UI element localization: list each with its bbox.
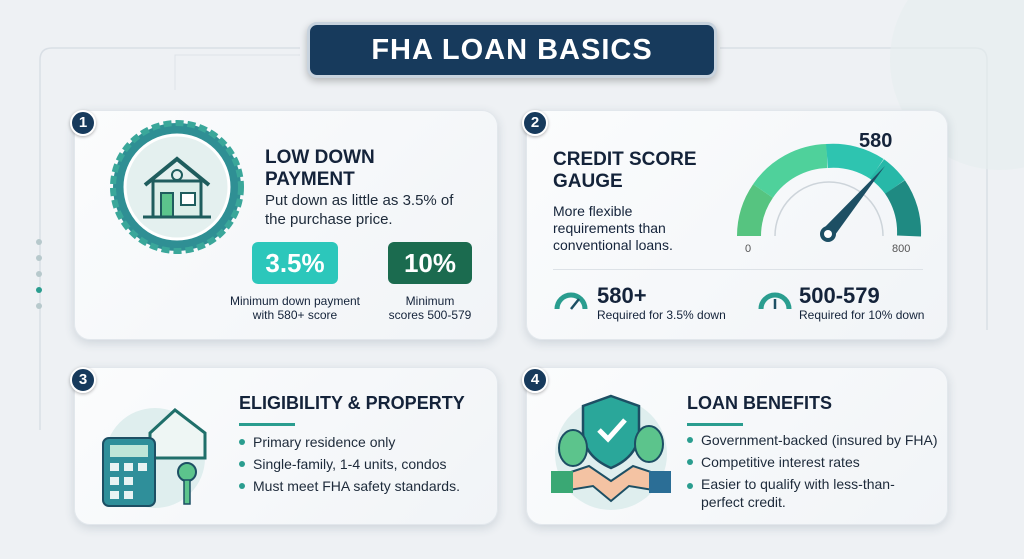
icon: calculator house keys: [102, 408, 206, 508]
text: 3: [79, 371, 87, 388]
panel: credit score gauge: requirements than: [553, 220, 666, 236]
chart: gauge: [737, 130, 922, 255]
panel: credit score gauge: [526, 110, 948, 340]
panel: credit score gauge: CREDIT SCORE: [553, 149, 697, 170]
stat 3.5%: [230, 242, 360, 322]
panel: eligibility: ELIGIBILITY & PROPERTY: [239, 393, 465, 413]
stat 500-579: [758, 283, 924, 322]
chart: gauge: 0: [745, 243, 751, 255]
text: 2: [531, 114, 539, 131]
list: [239, 434, 460, 494]
panel: loan benefits: LOAN BENEFITS: [687, 393, 832, 413]
heading: PAYMENT: [265, 169, 355, 190]
panel: eligibility: [74, 367, 498, 525]
stat 10%: [388, 242, 472, 322]
panel: low down payment: [74, 110, 498, 340]
list: Must meet FHA safety standards.: [253, 478, 460, 494]
stat 580+: Required for 3.5% down: [597, 308, 726, 322]
heading: LOW DOWN: [265, 147, 375, 168]
text: 1: [79, 114, 87, 131]
heading: [265, 147, 375, 190]
text: [265, 192, 454, 228]
panel: loan benefits: [526, 367, 948, 525]
stat 580+: [554, 283, 726, 322]
stat 10%: scores 500-579: [389, 308, 471, 322]
list: Primary residence only: [253, 434, 395, 450]
list: Single-family, 1-4 units, condos: [253, 456, 446, 472]
decorative dots: [36, 239, 42, 309]
title: [307, 22, 717, 78]
panel: credit score gauge: GAUGE: [553, 171, 623, 192]
stat 3.5%: Minimum down payment: [230, 294, 360, 308]
chart: gauge: 800: [892, 243, 910, 255]
panel: loan benefits: Easier to qualify with less-than-perfect credit.: [701, 476, 895, 510]
text: Put down as little as 3.5% of: [265, 192, 453, 209]
stat 580+: 580+: [597, 283, 647, 308]
chart: gauge: 580: [859, 130, 892, 152]
panel: loan benefits: Competitive interest rates: [701, 454, 860, 470]
title: FHA LOAN BASICS: [371, 34, 653, 66]
stat 500-579: Required for 10% down: [799, 308, 924, 322]
stat 10%: Minimum: [406, 294, 454, 308]
stat 500-579: 500-579: [799, 283, 880, 308]
text: 4: [531, 371, 539, 388]
stat 3.5%: with 580+ score: [253, 308, 337, 322]
icon: house badge: [110, 120, 244, 254]
icon: shield handshake: [551, 394, 671, 510]
stat 10%: 10%: [404, 248, 456, 278]
panel: credit score gauge: More flexible: [553, 203, 632, 219]
text: the purchase price.: [265, 211, 393, 228]
panel: loan benefits: Government-backed (insured by FHA): [701, 432, 938, 448]
panel: credit score gauge: conventional loans.: [553, 237, 673, 253]
stat 3.5%: 3.5%: [265, 248, 325, 278]
